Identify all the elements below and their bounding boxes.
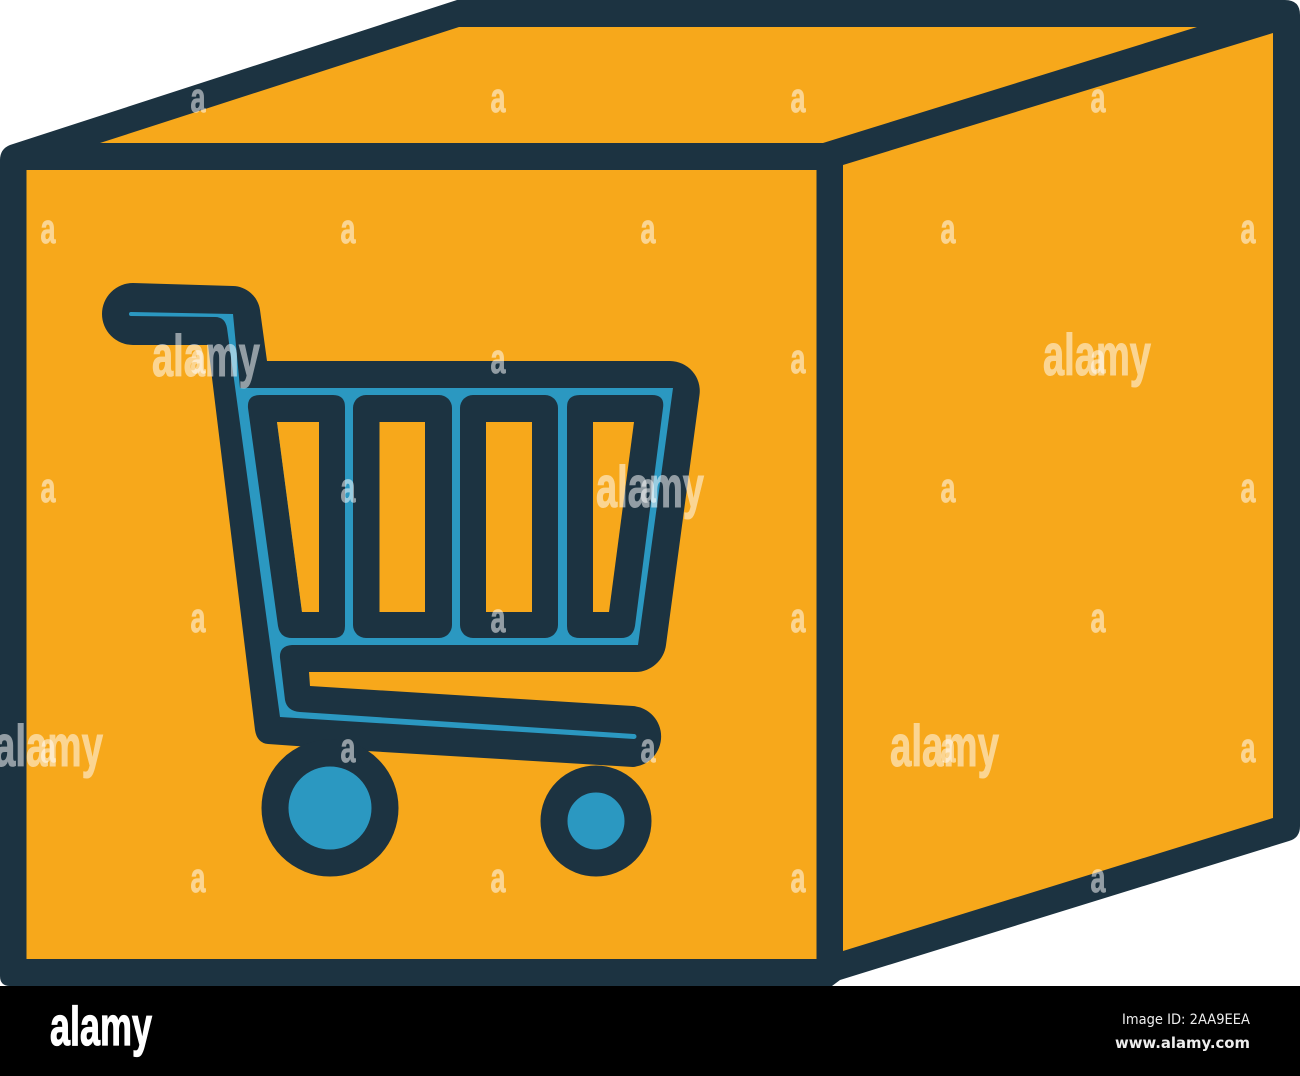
- watermark: small a marks: a: [790, 594, 806, 641]
- watermark: small a marks: a: [1240, 205, 1256, 252]
- watermark: small a marks: a: [190, 335, 206, 382]
- watermark: large alamy marks: alamy: [1043, 323, 1151, 388]
- watermark: small a marks: a: [940, 464, 956, 511]
- footer image id: Image ID: 2AA9EEA: [1122, 1012, 1250, 1028]
- cart basket slot 2: [353, 395, 452, 638]
- icon: shopping cart: [102, 283, 700, 863]
- cart frame blue inner line: [129, 312, 673, 739]
- cart basket slot 1 opening: [277, 422, 319, 612]
- cart basket slot 4 opening: [593, 422, 634, 612]
- box right face: [843, 33, 1273, 951]
- cart basket slot 2 opening: [380, 422, 425, 612]
- footer background: [0, 986, 1300, 1076]
- watermark: small a marks: a: [790, 74, 806, 121]
- cart basket slot 3: [460, 395, 558, 638]
- watermark: small a marks: a: [1090, 594, 1106, 641]
- watermark: small a marks: a: [190, 854, 206, 901]
- watermark: large alamy marks: [0, 323, 1151, 779]
- watermark: small a marks: a: [940, 724, 956, 771]
- cart small wheel: [554, 779, 638, 863]
- watermark: small a marks: a: [1090, 854, 1106, 901]
- watermark: small a marks: a: [40, 464, 56, 511]
- watermark: small a marks: a: [1240, 724, 1256, 771]
- box front face: [26, 170, 816, 959]
- watermark: small a marks: a: [340, 724, 356, 771]
- watermark: large alamy marks: alamy: [596, 455, 704, 520]
- cart basket slot 1: [248, 395, 345, 638]
- cart large wheel: [275, 753, 385, 863]
- watermark: small a marks: a: [340, 205, 356, 252]
- watermark: small a marks: a: [640, 724, 656, 771]
- watermark: small a marks: a: [640, 464, 656, 511]
- footer logo: alamy: [50, 995, 152, 1057]
- cart basket slot 3 opening: [486, 422, 532, 612]
- cart basket slot 4: [567, 395, 663, 638]
- watermark: small a marks: a: [790, 854, 806, 901]
- watermark: small a marks: a: [790, 335, 806, 382]
- watermark: large alamy marks: alamy: [152, 324, 260, 389]
- watermark: small a marks: a: [640, 205, 656, 252]
- footer bar: [0, 986, 1300, 1076]
- cart frame silhouette: [102, 283, 700, 767]
- watermark: small a marks: a: [490, 74, 506, 121]
- watermark: small a marks: a: [190, 594, 206, 641]
- box top face: [100, 27, 1197, 143]
- watermark: small a marks: a: [1090, 335, 1106, 382]
- watermark: small a marks: a: [490, 854, 506, 901]
- watermark: small a marks: a: [40, 205, 56, 252]
- watermark: small a marks: a: [40, 724, 56, 771]
- watermark: small a marks: [40, 74, 1256, 901]
- watermark: small a marks: a: [490, 594, 506, 641]
- watermark: small a marks: a: [340, 464, 356, 511]
- watermark: large alamy marks: alamy: [890, 714, 999, 779]
- watermark: small a marks: a: [1240, 464, 1256, 511]
- footer url: www.alamy.com: [1115, 1034, 1250, 1052]
- watermark: small a marks: a: [490, 335, 506, 382]
- watermark: small a marks: a: [940, 205, 956, 252]
- watermark: small a marks: a: [190, 74, 206, 121]
- watermark: small a marks: a: [1090, 74, 1106, 121]
